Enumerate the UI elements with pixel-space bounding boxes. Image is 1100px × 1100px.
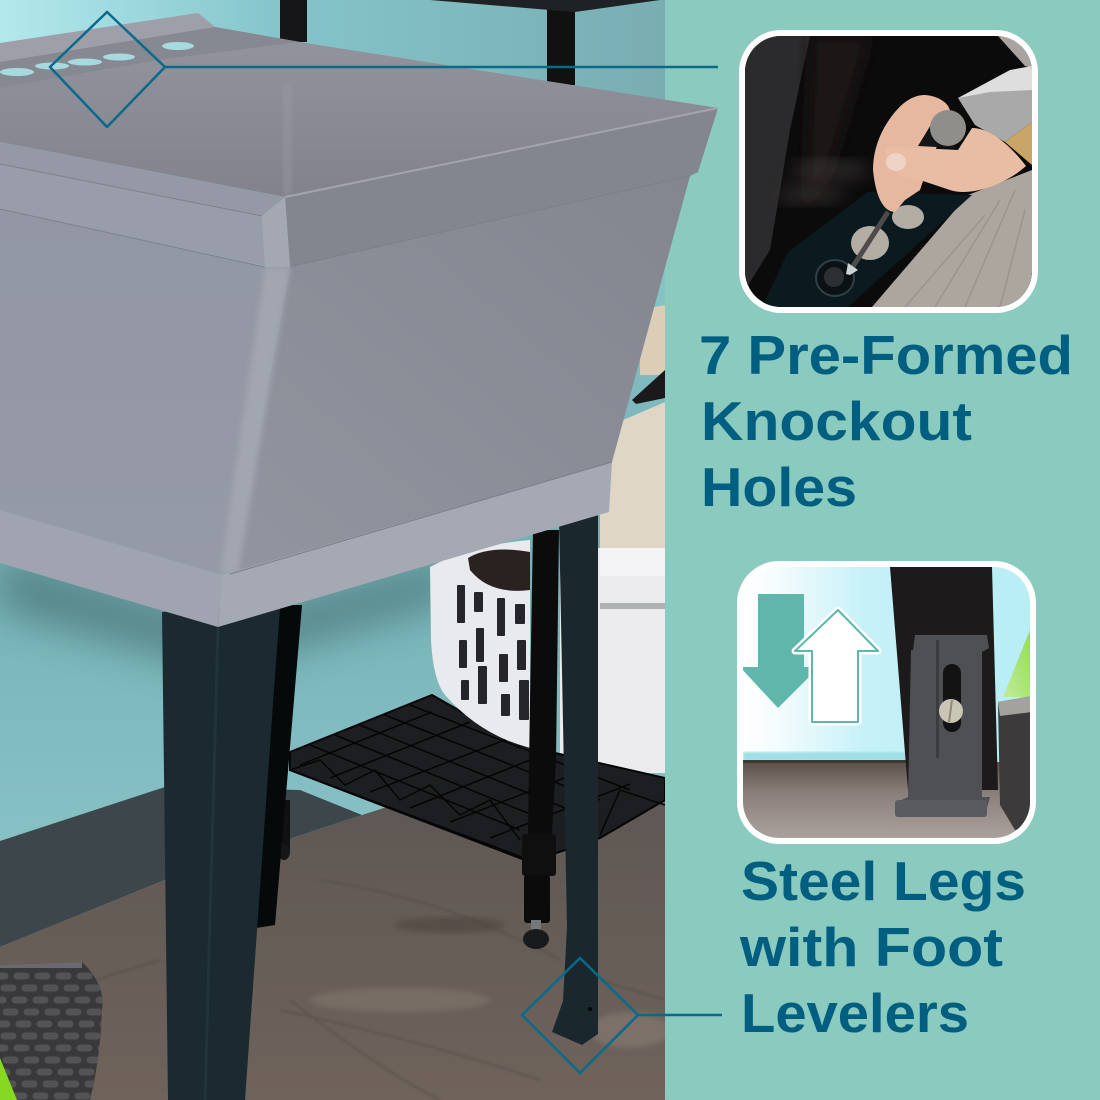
towel at edge <box>998 696 1032 830</box>
body, right face <box>232 176 690 574</box>
black shelf post with foot <box>522 530 559 949</box>
product photo background: laundry room <box>0 0 670 1100</box>
back deck <box>0 13 300 90</box>
wood surface <box>872 170 1032 307</box>
rear left leg <box>256 605 302 928</box>
heading: Steel Legs with Foot Levelers: Steel Legs <box>741 850 1026 912</box>
tabletop <box>743 762 1030 838</box>
screwdriver <box>852 212 888 268</box>
white bucket <box>560 548 665 773</box>
adjustment slot <box>943 664 961 732</box>
hammer handle <box>1005 122 1032 165</box>
corner highlight <box>220 267 290 574</box>
hammer head <box>958 68 1032 142</box>
heading: 7 Pre-Formed Knockout Holes: 7 Pre-Formed <box>699 324 1073 386</box>
photo panel: knockout holes being punched <box>739 30 1038 313</box>
plastic leveler bracket <box>902 635 990 808</box>
baseboard <box>0 787 362 947</box>
front left leg <box>162 605 280 1100</box>
black shelf post, top <box>547 10 575 85</box>
folded towel on shelf <box>600 402 665 560</box>
shelf fragment at upper right <box>632 370 665 404</box>
front rim, left <box>0 142 285 216</box>
green leaf <box>1003 630 1030 697</box>
slotted screw <box>939 699 963 723</box>
sink legs <box>162 510 598 1100</box>
callout: knockout holes marker <box>50 12 718 127</box>
front right leg <box>552 510 598 1045</box>
heading: 7 Pre-Formed Knockout Holes: Knockout <box>701 390 972 452</box>
black steel leg <box>890 567 998 790</box>
wall <box>0 0 665 860</box>
heading: 7 Pre-Formed Knockout Holes: Holes <box>701 456 857 518</box>
laundry basket <box>430 540 530 748</box>
heading: Steel Legs with Foot Levelers: Levelers <box>741 982 969 1044</box>
body, left face <box>0 209 290 575</box>
green plant tip <box>0 1058 17 1100</box>
up arrow <box>795 610 878 722</box>
photo panel: adjustable foot leveler <box>737 561 1036 844</box>
heading: Steel Legs with Foot Levelers <box>739 850 1026 1044</box>
faucet holes <box>0 42 194 76</box>
front rim, right <box>285 108 718 267</box>
hammer neck <box>918 126 954 148</box>
recessed band with faucet holes <box>0 27 300 88</box>
thumb and back of hand <box>923 128 1026 192</box>
callout: foot leveler marker <box>522 958 722 1073</box>
bottom band <box>0 510 222 627</box>
fingers <box>873 95 950 212</box>
wood floor <box>0 790 670 1100</box>
wire shelf <box>290 695 665 862</box>
basin interior <box>0 42 718 197</box>
heading: 7 Pre-Formed Knockout Holes <box>699 324 1073 518</box>
chenille mop <box>0 960 110 1100</box>
blue backdrop <box>743 567 1030 762</box>
gray utility sink <box>0 13 718 627</box>
down arrow <box>743 594 808 708</box>
knockout strip <box>762 192 972 307</box>
heading: Steel Legs with Foot Levelers: with Foot <box>739 916 1003 978</box>
short post at far left <box>282 800 290 852</box>
dark sink underside <box>745 36 1032 307</box>
